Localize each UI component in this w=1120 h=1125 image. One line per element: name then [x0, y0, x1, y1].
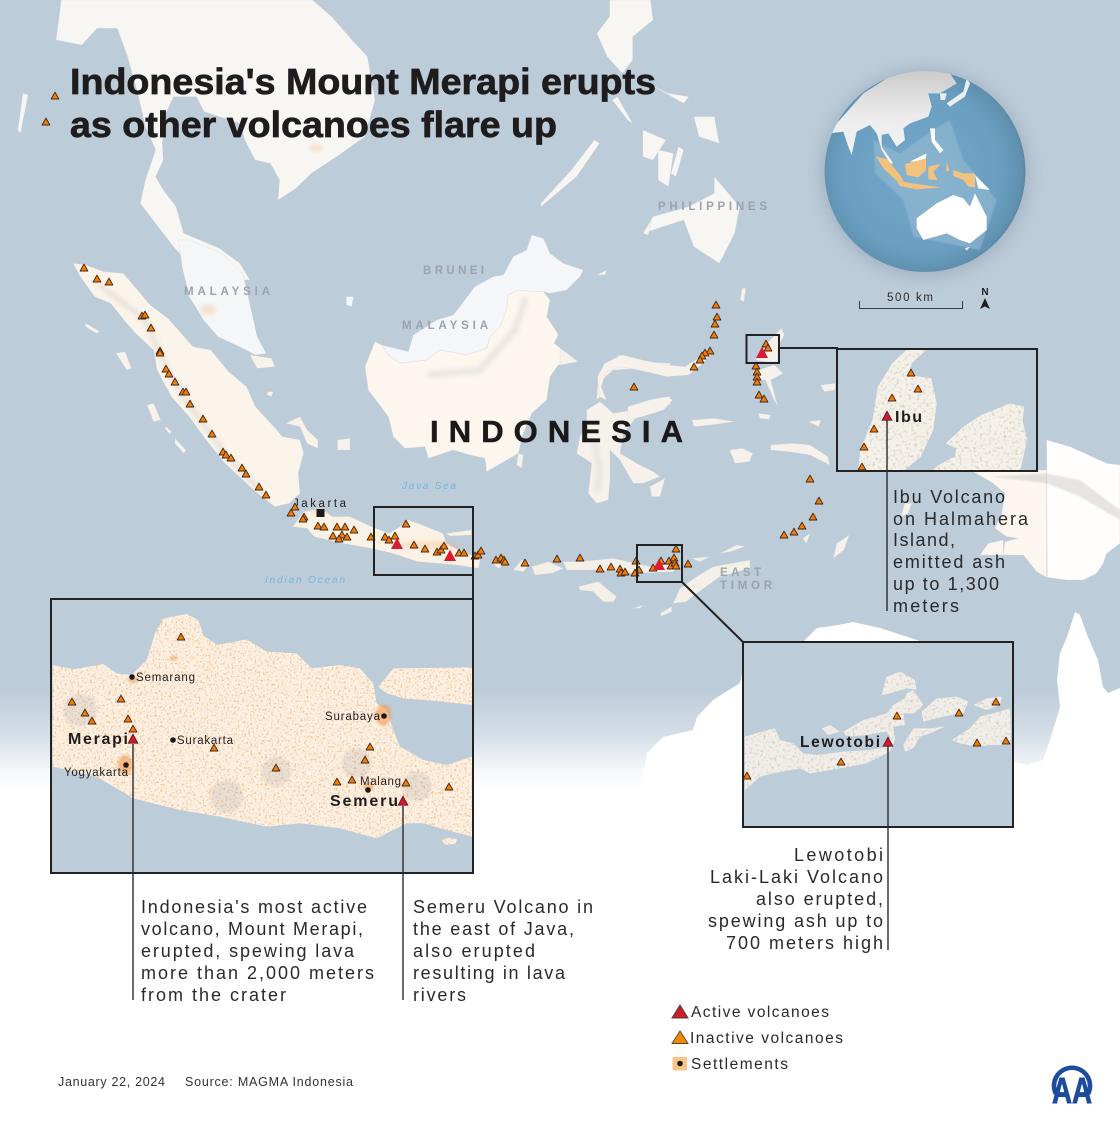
legend: inactive volcanoes: Inactive volcanoes — [690, 1030, 843, 1047]
legend — [672, 1004, 843, 1073]
country and sea labels: TIMOR — [720, 580, 773, 592]
callout: Ibu: emitted ash — [893, 552, 1005, 572]
globe shadow — [823, 71, 1027, 275]
terrain shading — [100, 285, 600, 492]
callout: Ibu: up to 1,300 — [893, 574, 999, 594]
callout: Merapi: from the crater — [141, 985, 286, 1005]
date and source: Source: MAGMA Indonesia — [185, 1075, 353, 1089]
land: Papua — [973, 440, 1120, 580]
country and sea labels: EAST — [720, 567, 761, 579]
city labels: Surakarta — [177, 735, 234, 747]
title: as other volcanoes flare up — [70, 104, 557, 145]
country label: Indonesia: INDONESIA — [430, 414, 683, 449]
volcano markers: active — [391, 347, 768, 570]
date and source — [58, 1075, 353, 1089]
locator boxes and connectors — [374, 335, 838, 642]
city labels: Yogyakarta — [64, 767, 129, 779]
callout: Semeru: resulting in lava — [413, 963, 566, 983]
legend: active volcanoes: Active volcanoes — [691, 1004, 829, 1021]
label: Merapi: Merapi — [68, 731, 128, 748]
city markers — [123, 674, 387, 793]
Java inactive volcanoes — [68, 633, 453, 790]
callout: Semeru: also erupted — [413, 941, 535, 961]
Flores inactive volcanoes — [743, 698, 1010, 779]
country and sea labels: PHILIPPINES — [658, 201, 767, 213]
inset background — [51, 599, 473, 873]
Java land — [53, 614, 472, 845]
callout: Lewotobi — [708, 845, 883, 953]
logo: Anadolu Agency: AA — [1052, 1070, 1092, 1111]
inset: Lewotobi — [743, 642, 1013, 827]
callout: Ibu — [893, 487, 1029, 616]
city labels: Semarang — [136, 672, 195, 684]
capital label: Jakarta: Jakarta — [293, 498, 347, 510]
land: Sulawesi, Maluku, Papua — [560, 288, 912, 558]
callout: Ibu: Island, — [893, 530, 955, 550]
land: Malay peninsula and Sumatra — [73, 240, 509, 568]
inset frame — [51, 599, 473, 873]
Java — [293, 508, 480, 568]
country and sea labels: BRUNEI — [423, 265, 484, 277]
globe locator — [820, 68, 1027, 275]
label: Lewotobi: Lewotobi — [800, 734, 880, 751]
callout: Merapi — [141, 897, 374, 1005]
label: Ibu: Ibu — [895, 409, 922, 426]
Lewotobi active volcano — [883, 737, 893, 746]
north arrow — [980, 287, 990, 309]
callout: Merapi: erupted, spewing lava — [141, 941, 355, 961]
callout: Semeru: the east of Java, — [413, 919, 574, 939]
callout: Merapi: more than 2,000 meters — [141, 963, 374, 983]
callout: Ibu: Ibu Volcano — [893, 487, 1005, 507]
north arrow: N — [981, 287, 989, 298]
callout: Semeru: rivers — [413, 985, 466, 1005]
callout: Lewotobi: Laki-Laki Volcano — [710, 867, 883, 887]
scale bar: 500 km — [887, 292, 933, 304]
city labels: Malang — [360, 776, 401, 788]
globe sphere — [820, 68, 1026, 272]
land: Borneo and Sulawesi west — [365, 220, 670, 503]
country and sea labels: Indian Ocean — [265, 575, 345, 586]
leader lines — [133, 420, 888, 1000]
callout: Lewotobi: Lewotobi — [794, 845, 883, 865]
land: northern Australia — [640, 612, 1120, 790]
callout: Merapi: volcano, Mount Merapi, — [141, 919, 363, 939]
title: Indonesia's Mount Merapi erupts — [70, 61, 656, 102]
capital label: Jakarta — [293, 498, 347, 517]
country and sea labels — [184, 201, 773, 592]
inset: Ibu — [837, 349, 1037, 472]
country and sea labels: MALAYSIA — [184, 286, 270, 298]
Ibu inactive volcanoes — [858, 369, 922, 470]
callout: Semeru — [413, 897, 593, 1005]
Halmahera land — [858, 350, 1027, 472]
callout: Ibu: meters — [893, 596, 959, 616]
label: Semeru: Semeru — [330, 793, 398, 810]
base map: sea and land — [0, 0, 1120, 790]
land: Lesser Sunda islands — [513, 545, 750, 616]
country and sea labels: MALAYSIA — [402, 320, 488, 332]
scale bar — [860, 292, 962, 308]
city labels — [64, 672, 401, 788]
city labels: Surabaya — [325, 711, 381, 723]
inset: Java — [51, 599, 473, 873]
land: Indochina and Philippines — [18, 0, 740, 280]
Flores land — [745, 672, 1011, 790]
volcano markers: inactive — [42, 92, 823, 576]
Ibu active volcano — [882, 411, 892, 420]
callout: Lewotobi: spewing ash up to — [708, 911, 883, 931]
callout: Merapi: Indonesia's most active — [141, 897, 367, 917]
date and source: January 22, 2024 — [58, 1075, 165, 1089]
title — [70, 61, 656, 145]
settlement glow — [200, 144, 460, 549]
callout: Lewotobi: also erupted, — [756, 889, 883, 909]
sea — [0, 0, 1120, 790]
fade to white — [0, 688, 1120, 790]
callout: Ibu: on Halmahera — [893, 509, 1029, 529]
Java active volcanoes — [128, 734, 408, 805]
country and sea labels: Java Sea — [401, 481, 456, 492]
callout: Lewotobi: 700 meters high — [726, 933, 883, 953]
legend: settlements: Settlements — [691, 1056, 788, 1073]
callout: Semeru: Semeru Volcano in — [413, 897, 593, 917]
